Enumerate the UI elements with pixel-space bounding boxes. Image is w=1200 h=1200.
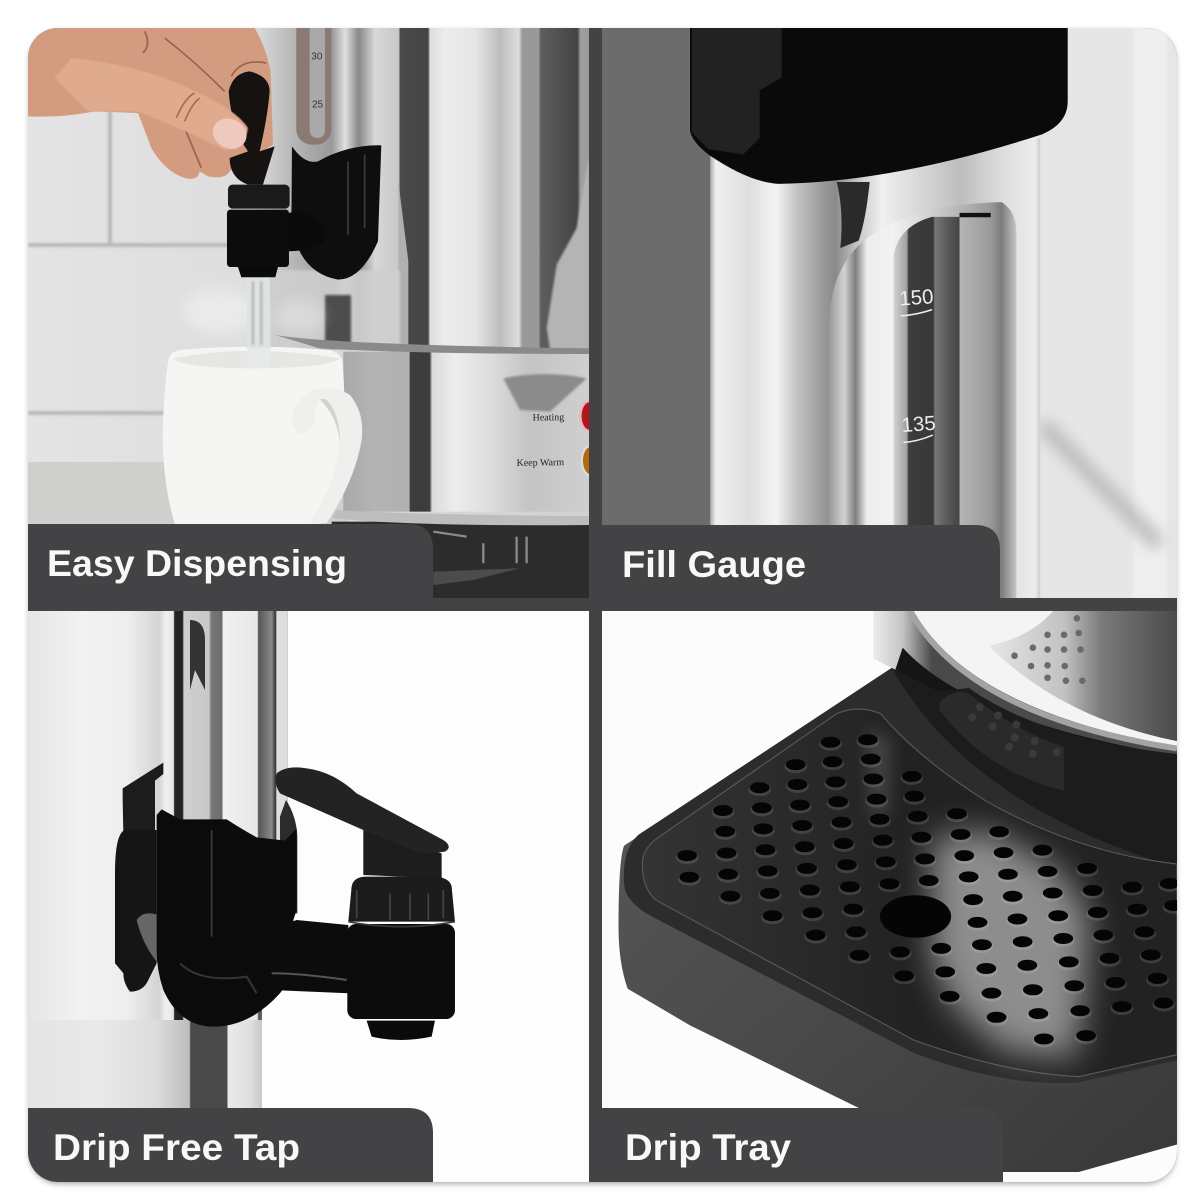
- heating lamp: [580, 400, 589, 432]
- wall tile grout: [28, 110, 228, 413]
- base: [332, 522, 590, 600]
- bracket: [280, 800, 297, 913]
- tap nozzle: [238, 267, 278, 277]
- right reflection taper: [547, 155, 589, 350]
- backdrop stripe: [1134, 28, 1167, 603]
- panel: easy dispensing photo: [28, 15, 599, 600]
- upper dark sliver: [837, 182, 870, 248]
- label: fill gauge: Fill Gauge: [622, 544, 806, 585]
- tap neck: [267, 920, 348, 993]
- tray holes: [676, 734, 1185, 1047]
- lever: [276, 767, 449, 854]
- lever: [229, 71, 275, 185]
- thumb: [55, 58, 248, 150]
- base highlights: [433, 532, 527, 563]
- mug inner rim: [173, 351, 340, 368]
- mug handle: [312, 392, 362, 524]
- valve ring: [348, 922, 455, 927]
- black lid: [690, 28, 1068, 184]
- lever stem: [363, 830, 442, 878]
- label: drip free tap: Drip Free Tap: [53, 1127, 300, 1168]
- valve nozzle: [367, 1021, 435, 1040]
- keep warm label: Keep Warm: [516, 457, 564, 469]
- channel: [829, 202, 1016, 603]
- label: drip tray: [602, 1108, 1003, 1182]
- gauge tube: [894, 217, 960, 603]
- steel interior: [989, 611, 1177, 741]
- sight tube: [296, 15, 331, 145]
- shelf recess: [939, 692, 1064, 791]
- finger creases: [143, 31, 266, 168]
- gauge ticks: [901, 310, 933, 442]
- tap mount: [291, 145, 381, 280]
- backdrop: [602, 611, 1177, 1186]
- reflection patch: [866, 728, 892, 816]
- below ring dark: [895, 648, 1177, 875]
- rear clip: [123, 763, 163, 833]
- lower section: [163, 277, 599, 600]
- rear valve: [115, 830, 157, 992]
- valve body: [347, 924, 455, 1019]
- backdrop left: [602, 28, 712, 603]
- mug handle inner shade: [312, 399, 340, 524]
- inner tray: [642, 709, 1177, 1077]
- water streaks top: [253, 281, 261, 345]
- mount highlight: [348, 155, 365, 235]
- base tray: [433, 568, 520, 585]
- heating label: Heating: [532, 412, 564, 424]
- sight tube centre: [310, 15, 325, 138]
- steel dots: [1011, 615, 1086, 684]
- tray rim: [624, 668, 1177, 1083]
- urn lower left area: [278, 269, 401, 350]
- band reflection: [503, 374, 587, 412]
- bottom rim: [332, 510, 590, 525]
- shelf dots: [968, 703, 1061, 758]
- water in mug: [248, 348, 270, 351]
- label: drip tray: Drip Tray: [625, 1127, 791, 1168]
- urn body: [255, 28, 589, 350]
- mark 30: 30: [311, 52, 323, 63]
- chrome urn side: [28, 611, 288, 1031]
- reflection block: [325, 295, 351, 345]
- tube reflection: [190, 620, 205, 690]
- hand and tap: [28, 15, 381, 348]
- steam top: [185, 295, 265, 335]
- steel ring: [910, 611, 1177, 749]
- bowl interior: [914, 611, 1177, 747]
- band: [343, 352, 590, 512]
- tube top mark: [960, 209, 991, 221]
- neck highlight: [272, 973, 347, 980]
- counter: [28, 462, 348, 524]
- label: easy dispensing: Easy Dispensing: [47, 543, 347, 584]
- gauge 135: 135: [901, 412, 936, 437]
- wet reflection: [932, 831, 1090, 1058]
- gauge 150: 150: [899, 285, 934, 311]
- panel: drip free tap photo: [28, 611, 589, 1182]
- mount highlights: [180, 830, 257, 993]
- tray silhouette: [619, 668, 1177, 1172]
- tap cap: [228, 185, 290, 209]
- upper shelf: [892, 668, 1177, 868]
- fingers: [28, 28, 273, 179]
- water stream: [254, 277, 270, 288]
- mug: [163, 347, 344, 525]
- steam: [183, 283, 250, 330]
- urn upper details: [398, 155, 589, 350]
- label: drip free tap: [28, 1108, 433, 1182]
- drain hole: [880, 895, 951, 938]
- valve cap: [348, 877, 455, 922]
- rear stalk: [137, 913, 158, 963]
- panel: fill gauge photo: [602, 28, 1177, 603]
- lid reflection: [692, 28, 782, 155]
- tap mount: [157, 809, 300, 1027]
- label: fill gauge: [602, 525, 1000, 611]
- steam right: [277, 300, 323, 333]
- label: easy dispensing: [28, 524, 433, 611]
- thumb nail: [208, 113, 252, 154]
- cap knurl: [357, 890, 443, 920]
- top rim: [275, 335, 590, 354]
- chrome cylinder: [710, 138, 1040, 603]
- keep warm lamp: [581, 446, 589, 476]
- water stream top: [247, 279, 271, 348]
- tap neck: [288, 212, 325, 251]
- water streaks: [252, 280, 265, 360]
- backdrop diagonal: [1042, 424, 1159, 545]
- left reflection taper: [398, 181, 408, 350]
- tap body: [227, 210, 289, 267]
- urn outer base: [873, 611, 1177, 868]
- urn lower: [28, 1020, 262, 1182]
- panel: drip tray photo: [602, 611, 1185, 1186]
- thumb knuckle: [176, 93, 200, 121]
- backdrop right: [602, 28, 1177, 603]
- mark 25: 25: [312, 99, 324, 110]
